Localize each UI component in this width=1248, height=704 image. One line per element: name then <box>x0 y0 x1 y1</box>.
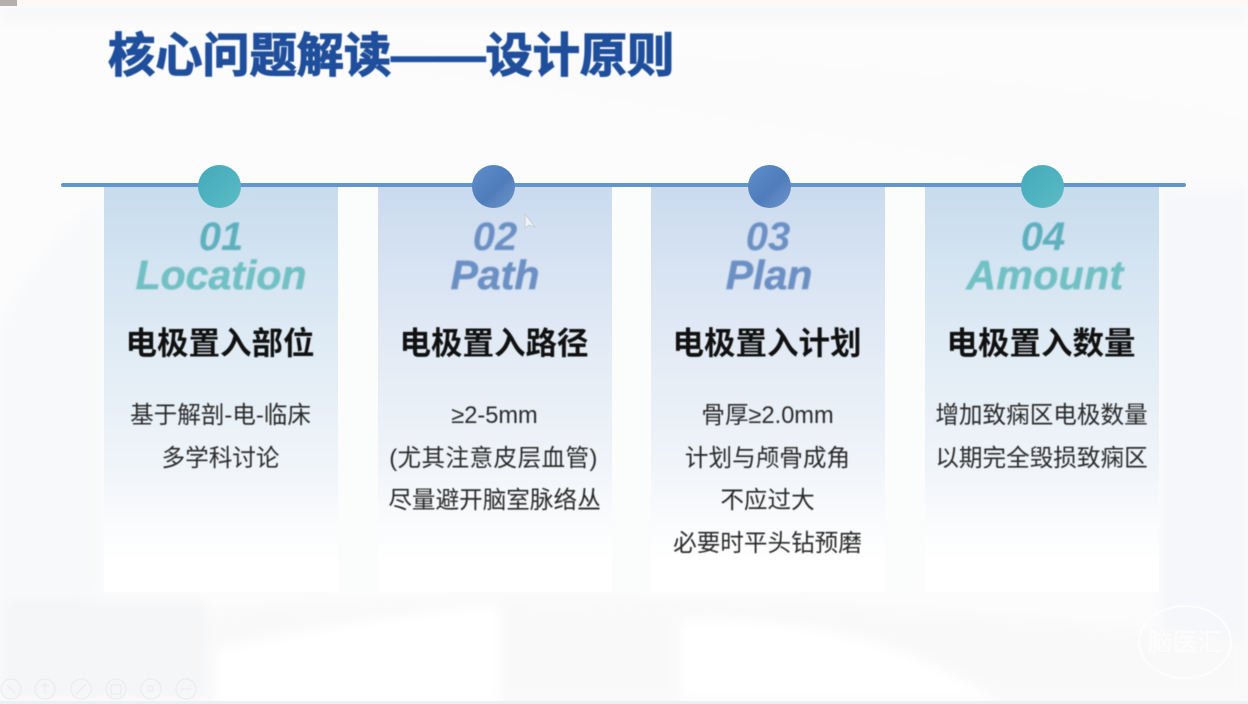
text block: 基于解剖-电-临床 <box>130 403 311 429</box>
heading: 电极置入部位 <box>125 325 314 361</box>
panel: location <box>104 186 338 592</box>
text block <box>673 403 862 557</box>
text block: 多学科讨论 <box>162 446 279 472</box>
timeline dot 3 <box>748 165 791 208</box>
timeline dot 1 <box>198 165 241 208</box>
toolbar icons <box>0 678 196 700</box>
panel: plan <box>651 186 885 592</box>
label Amount: Amount <box>966 252 1124 298</box>
text block: 以期完全毁损致痫区 <box>935 446 1148 472</box>
label Location: Location <box>136 252 306 298</box>
text block <box>130 402 311 472</box>
timeline dot 2 <box>472 165 515 208</box>
panel: amount <box>925 186 1159 592</box>
text block: 必要时平头钻预磨 <box>673 531 862 557</box>
text block: 不应过大 <box>720 488 815 514</box>
heading: 电极置入路径 <box>399 325 588 361</box>
text block <box>388 403 601 514</box>
number 03: 03 <box>746 215 790 259</box>
panel: path <box>378 186 612 592</box>
timeline line <box>61 183 1186 187</box>
title: 核心问题解读——设计原则 <box>108 30 674 83</box>
watermark logo <box>1134 602 1236 680</box>
heading: 电极置入数量 <box>946 325 1136 361</box>
text block: 尽量避开脑室脉络丛 <box>388 488 601 514</box>
label Path: Path <box>451 252 539 298</box>
number 02: 02 <box>473 215 517 259</box>
text block: 增加致痫区电极数量 <box>935 403 1148 429</box>
timeline dot 4 <box>1021 165 1064 208</box>
number 01: 01 <box>199 215 243 259</box>
text block: 骨厚≥2.0mm <box>701 403 834 429</box>
label Plan: Plan <box>726 252 812 298</box>
icon: cursor <box>524 213 536 229</box>
number 04: 04 <box>1021 215 1065 259</box>
watermark logo: 脑医汇 <box>1147 629 1223 657</box>
text block: ≥2-5mm <box>451 403 538 429</box>
text block: 计划与颅骨成角 <box>685 446 850 472</box>
text block <box>935 402 1148 472</box>
heading: 电极置入计划 <box>672 325 862 361</box>
text block: (尤其注意皮层血管) <box>389 446 598 472</box>
